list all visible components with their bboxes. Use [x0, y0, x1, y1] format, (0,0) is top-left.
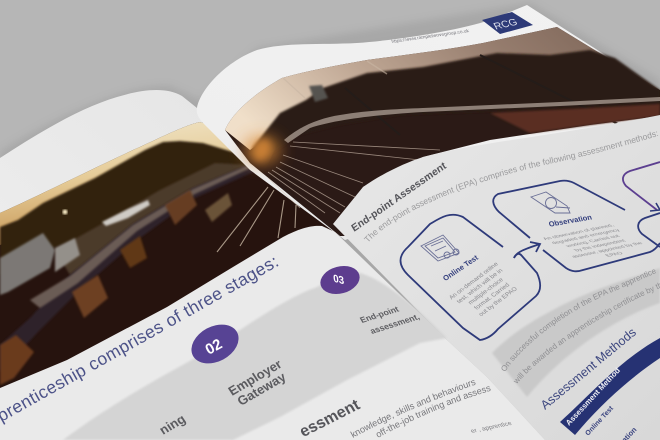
intro sentence: The end-point assessment (EPA) comprises of the following assessment methods:	[364, 132, 658, 242]
body: observation: assessor, appointed by the	[571, 241, 646, 259]
tree line	[0, 141, 257, 275]
panel: third assessment box (cropped)	[623, 162, 660, 247]
panel: upper left page	[0, 90, 340, 400]
label: observation: Observation	[547, 213, 593, 229]
logo	[482, 12, 533, 34]
table: assessment methods: Assessment Method	[564, 366, 622, 427]
stage 03 badge: 03	[333, 272, 345, 287]
heading: assessment methods: Assessment Methods	[538, 325, 639, 412]
arrow	[650, 203, 660, 211]
label: end-point assessment	[358, 304, 421, 336]
rails	[217, 187, 296, 252]
heading: end-point assessment: End-point Assessment	[350, 160, 449, 235]
body: observation: An observation of planned,	[542, 224, 617, 241]
label: online test: Online Test	[441, 253, 480, 283]
body text: knowledge, skills and behaviours	[350, 380, 476, 438]
body: online test	[448, 261, 525, 322]
body text right: er , apprentice	[469, 420, 514, 435]
body: observation: EPAO	[604, 251, 626, 258]
label: end-point assessment: End-point	[358, 304, 401, 325]
panel: lower right page	[333, 115, 660, 440]
body: online test: An on-demand online	[448, 261, 500, 301]
panel: lower left page	[0, 226, 545, 440]
completion sentence: On successful completion of the EPA the apprentice	[502, 270, 656, 371]
panel: online test box	[400, 215, 540, 340]
panel: upper right page	[197, 5, 660, 240]
buildings and tree silhouette	[250, 50, 660, 155]
grey band	[492, 268, 660, 397]
train roof and carriages	[0, 163, 258, 372]
arrow	[514, 242, 540, 258]
white vans	[102, 200, 150, 226]
body text: off-the-job training and assess	[376, 386, 491, 438]
icon: clipboard with magnifier	[531, 192, 570, 213]
body: online test: test, which will be in	[455, 267, 505, 305]
trackside yard	[55, 163, 250, 275]
sunlit yard patches	[205, 193, 232, 222]
icon: certificate	[421, 235, 459, 261]
building	[0, 233, 55, 295]
right photograph: rail tracks into the sun	[225, 27, 660, 236]
stage 03 badge	[317, 262, 363, 298]
train and platform	[284, 97, 660, 143]
body: online test: out by the EPAO	[477, 286, 519, 318]
table: assessment methods	[560, 338, 660, 440]
label: end-point assessment: assessment,	[368, 312, 421, 336]
left photograph: railway at sunset	[0, 122, 340, 392]
logo: RCG	[492, 17, 520, 32]
stage 02 badge: 02	[203, 336, 225, 359]
subheading: assessment: essment	[297, 396, 364, 440]
web address: https://www.rampletwovegroup.co.uk	[391, 28, 470, 45]
table header	[560, 338, 660, 435]
label: on-programme training (cropped): ning	[156, 411, 188, 438]
body: observation: degraded and emergency	[551, 228, 622, 245]
body: online test: format. Carried	[473, 282, 512, 311]
grey swoosh band	[63, 273, 447, 440]
panel: observation box	[493, 181, 660, 271]
table row: online test: Online Test	[584, 405, 615, 437]
stage 02 badge	[185, 317, 245, 371]
label: employer gateway: Gateway	[234, 369, 289, 409]
body: observation: working. Carried out	[564, 234, 622, 249]
body: online test: multiple-choice	[467, 276, 506, 306]
body: observation: by the independent	[573, 239, 628, 253]
crane	[283, 61, 387, 98]
pylons	[345, 55, 620, 135]
rail lines	[268, 142, 440, 213]
body: observation	[542, 224, 653, 263]
label: employer gateway: Employer	[225, 356, 285, 399]
sun glow	[244, 136, 280, 164]
